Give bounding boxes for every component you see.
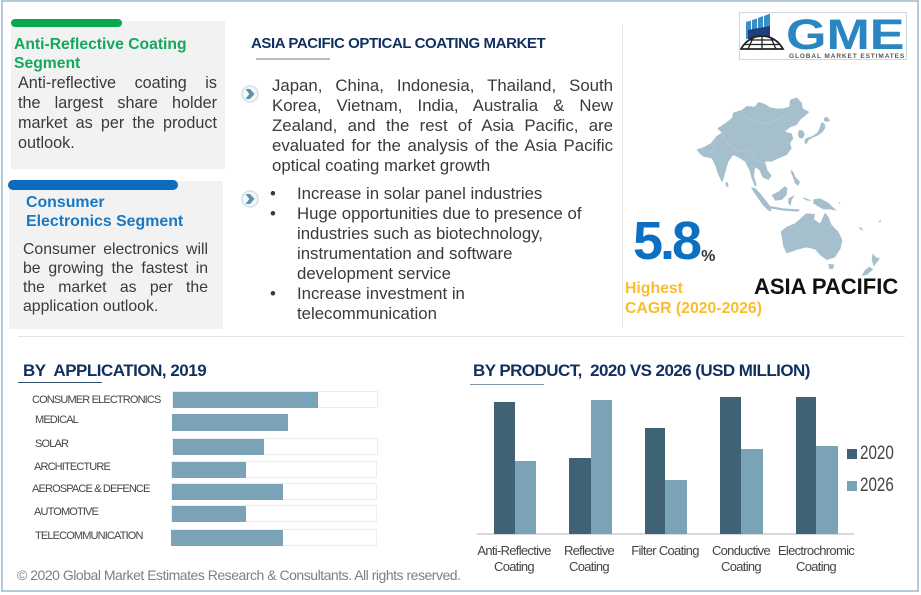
title: ASIA PACIFIC OPTICAL COATING MARKET: [251, 35, 545, 52]
text: growth drivers list: •: [270, 184, 276, 202]
bar: solar: [35, 438, 378, 455]
icon: chevron bullet 1: [241, 85, 259, 103]
bar: medical: [35, 414, 288, 431]
category label: anti-reflective: Coating: [494, 559, 534, 574]
bar: aerospace and defence: [32, 483, 377, 500]
legend swatch 2026: [847, 481, 857, 491]
icon: logo globe and city bars: [740, 14, 784, 50]
bar: automotive: AUTOMOTIVE: [34, 506, 98, 518]
title underline: [256, 58, 330, 60]
text: consumer electronics description: be growing the fastest in: [23, 260, 208, 277]
text: growth drivers list: Increase in solar panel industries: [297, 184, 542, 202]
bar: architecture: [34, 461, 377, 478]
stat: CAGR caption: CAGR (2020-2026): [625, 300, 762, 317]
legend label 2020: 2020: [860, 443, 894, 464]
category label: reflective: [564, 543, 614, 574]
text: anti-reflective description: [18, 74, 217, 152]
text: growth drivers list: Increase investment in: [297, 284, 465, 302]
bar: aerospace and defence: AEROSPACE & DEFENCE: [32, 483, 150, 495]
columns: anti-reflective coating: [494, 402, 536, 534]
columns: electrochromic coating: [796, 397, 838, 534]
legend: 2020 and 2026: [847, 443, 894, 496]
heading: anti-reflective: Segment: [14, 54, 80, 72]
text: anti-reflective description: the largest share holder: [18, 94, 217, 112]
underline: by product: [470, 384, 544, 385]
text: growth drivers list: development service: [297, 264, 451, 282]
category label: electrochromic: Electrochromic: [778, 543, 854, 558]
text: anti-reflective description: market as per the product: [18, 114, 217, 132]
panel: anti-reflective coating segment: [11, 19, 225, 169]
columns: filter coating: [645, 428, 687, 534]
bar: medical: MEDICAL: [35, 414, 78, 426]
text: consumer electronics description: [23, 241, 208, 315]
map: Asia Pacific: [696, 97, 881, 276]
panel background: [9, 181, 223, 329]
columns: conductive coating: [720, 397, 763, 534]
footer copyright: © 2020 Global Market Estimates Research & Consultants. All rights reserved.: [17, 567, 461, 583]
text: country coverage: Korea, Vietnam, India, Australia & New: [272, 96, 613, 114]
text: country coverage: optical coating market growth: [272, 156, 490, 174]
text: country coverage: evaluated for the analysis of the Asia Pacific: [272, 136, 613, 154]
bar: consumer electronics: [32, 391, 378, 408]
mainland Asia: [697, 97, 809, 187]
logo wordmark: GME: [786, 12, 905, 59]
category label: conductive: [712, 543, 770, 574]
stat: CAGR caption: Highest: [625, 280, 683, 297]
heading: anti-reflective: [14, 36, 187, 72]
underline: by application: [18, 382, 102, 383]
stat: CAGR value: 5.8%: [633, 211, 715, 271]
category label: filter: Filter Coating: [631, 543, 699, 558]
bar: telecommunication: TELECOMMUNICATION: [35, 530, 143, 542]
text: country coverage: Zealand, and the rest of Asia Pacific, are: [272, 116, 613, 134]
text: growth drivers list: instrumentation and software: [297, 244, 512, 262]
text: consumer electronics description: Consumer electronics will: [23, 241, 208, 258]
heading: by application: BY APPLICATION, 2019: [23, 360, 206, 380]
panel: consumer electronics segment: [8, 180, 223, 329]
text: growth drivers list: industries such as biotechnology,: [297, 224, 543, 242]
text: anti-reflective description: outlook.: [18, 134, 75, 152]
category label: reflective: Reflective: [564, 543, 614, 558]
category label: electrochromic: Coating: [796, 559, 836, 574]
text: consumer electronics description: the market as per the: [23, 279, 208, 296]
bar: telecommunication: [35, 529, 377, 546]
vertical divider: [622, 25, 623, 328]
bar chart: by application: [32, 391, 378, 546]
heading: consumer electronics: Consumer: [26, 194, 105, 211]
text: growth drivers list: •: [270, 204, 276, 222]
Asian islands: [725, 117, 830, 211]
category label: anti-reflective: [477, 543, 551, 574]
category label: anti-reflective: Anti-Reflective: [477, 543, 551, 558]
text: growth drivers list: [270, 184, 582, 322]
axis baseline: [477, 533, 854, 535]
heading: consumer electronics: [26, 194, 183, 230]
Oceania and Indonesia: [770, 170, 881, 276]
category label: conductive: Conductive: [712, 543, 770, 558]
stat: CAGR caption: [625, 280, 762, 317]
bar: automotive: [34, 505, 377, 522]
legend swatch 2020: [847, 449, 857, 459]
bar: architecture: ARCHITECTURE: [34, 461, 110, 473]
column chart: by product: [477, 397, 854, 574]
text: growth drivers list: telecommunication: [297, 304, 437, 322]
text: anti-reflective description: Anti-reflective coating is: [18, 74, 217, 92]
text: growth drivers list: Huge opportunities due to presence of: [297, 204, 582, 222]
heading: by product: BY PRODUCT, 2020 VS 2026 (USD MILLION): [473, 360, 810, 380]
text: growth drivers list: •: [270, 284, 276, 302]
text: country coverage: Japan, China, Indonesia, Thailand, South: [272, 76, 613, 94]
horizontal divider: [18, 336, 905, 337]
category label: electrochromic: [778, 543, 854, 574]
text: country coverage: [272, 76, 613, 174]
panel background: [11, 21, 225, 169]
heading: consumer electronics: Electronics Segment: [26, 213, 183, 230]
category label: conductive: Coating: [721, 559, 761, 574]
bar: solar: SOLAR: [35, 438, 68, 450]
blue accent bar: [8, 180, 178, 190]
text: consumer electronics description: application outlook.: [23, 298, 158, 315]
heading: anti-reflective: Anti-Reflective Coating: [14, 36, 187, 52]
columns: reflective coating: [569, 400, 612, 534]
logo tagline: GLOBAL MARKET ESTIMATES: [789, 52, 905, 60]
category label: reflective: Coating: [569, 559, 609, 574]
icon: chevron bullet 2: [241, 190, 259, 208]
legend label 2026: 2026: [860, 475, 894, 496]
logo: GME: [739, 12, 907, 60]
map label: ASIA PACIFIC: [754, 274, 898, 299]
green accent bar: [11, 19, 122, 27]
bar: consumer electronics: CONSUMER ELECTRONICS: [32, 394, 160, 406]
